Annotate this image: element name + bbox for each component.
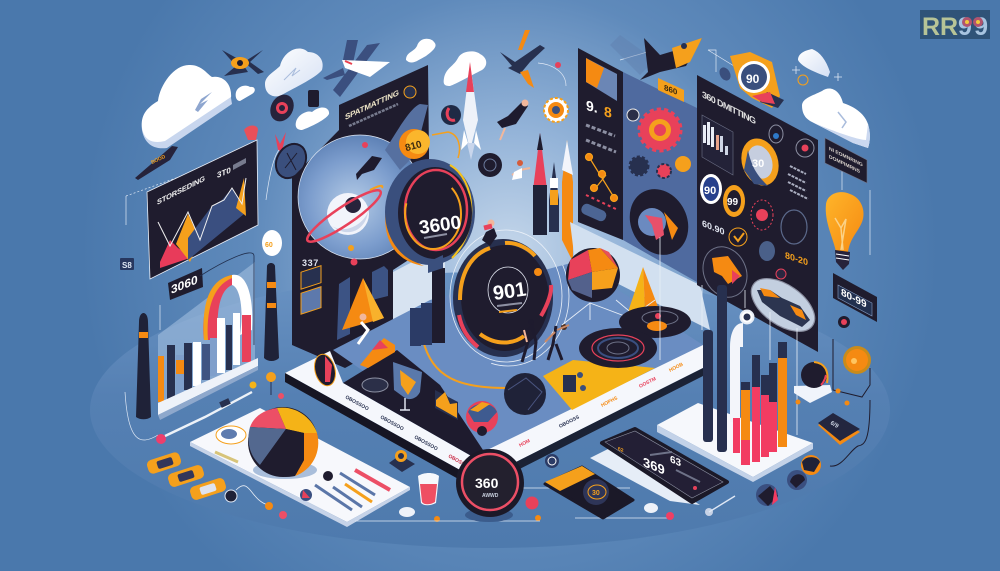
- node: red on left: [156, 382, 256, 444]
- icon: wine glass shield: [393, 362, 422, 410]
- rocket: white: [461, 62, 481, 160]
- icon: settings cog: [544, 98, 568, 122]
- yellow pin: [266, 372, 284, 399]
- donut: 30: [735, 134, 785, 190]
- platform labels: OBOSSOO: [447, 454, 473, 471]
- watermark: RR: [922, 13, 958, 41]
- main gear: [640, 110, 680, 150]
- card: yellow chip: 6/9: [829, 421, 840, 430]
- chart backing panel: [158, 262, 255, 408]
- white rounded stem: [730, 323, 743, 347]
- badge: 810: [399, 129, 430, 159]
- node network: [586, 154, 618, 202]
- figure: skydiver: [356, 156, 382, 180]
- phone: small: [545, 466, 633, 518]
- sweeping yellow arc: [423, 340, 506, 388]
- platform labels: HOM: [518, 438, 531, 449]
- cloud: large left: [142, 65, 232, 148]
- small pill: [644, 503, 658, 513]
- pencil rockets: [533, 133, 573, 262]
- callout: label panel: DOMPIMRNS: [829, 154, 860, 175]
- ring: dark: [545, 454, 559, 468]
- heading: spatmatting: SPATMATTING: [345, 87, 399, 122]
- icon: pie node: [300, 471, 333, 501]
- phone: large: 369: [643, 454, 665, 478]
- panel: left dark: [578, 48, 623, 240]
- figure: jumper: [497, 100, 528, 140]
- badge: 90: 90: [704, 185, 716, 197]
- rocket jet: [610, 35, 702, 80]
- dial on plinth: [794, 362, 832, 403]
- gauge: 360 bottom: [456, 449, 524, 522]
- white strip: right: [481, 345, 703, 475]
- platform labels: [344, 361, 685, 471]
- phone: small: 30: [592, 490, 600, 497]
- yellow wedge: [543, 360, 655, 410]
- badge: 860: [658, 78, 684, 102]
- ring handle: [740, 310, 754, 324]
- small eye icons: [769, 125, 814, 157]
- gauge: 360 bottom: AWWD: [482, 493, 499, 499]
- icon: red pin: [244, 126, 258, 140]
- pillar: far left: [136, 313, 151, 419]
- value box: 3060: [168, 268, 203, 300]
- watermark: 99: [958, 13, 988, 41]
- planet and ring: [302, 184, 386, 248]
- callout: label panel: NI EOMNRING: [829, 146, 863, 168]
- pie chart: [248, 407, 318, 479]
- value box: 3060: 3060: [171, 273, 198, 297]
- light band behind left panel: [393, 245, 445, 350]
- airplane icon: [323, 40, 390, 97]
- gauge: 360 bottom: 360: [475, 475, 499, 491]
- cloud: small left: [236, 86, 255, 101]
- mini donut: [216, 426, 246, 444]
- phone: large: 63: [670, 454, 681, 469]
- strip side: right: [490, 368, 703, 484]
- stage platform: [285, 262, 703, 490]
- icon: sparkle and dial: [792, 66, 842, 85]
- small target on dark floor: [362, 378, 388, 392]
- cloud: top centre: [406, 39, 436, 63]
- gauge: 3600: 3600: [418, 212, 463, 239]
- flying badge: 90: [717, 52, 784, 108]
- panel: left dark: 8: [604, 104, 612, 122]
- text: 80-20: 80-20: [785, 250, 808, 267]
- pillar: middle: [264, 263, 279, 361]
- cloud: right large: [802, 88, 870, 148]
- ball: dark: [504, 373, 546, 415]
- figure: runner with flame: [358, 314, 395, 368]
- mini chart on dark floor: [435, 390, 458, 420]
- drone icon: [222, 50, 264, 76]
- panel: left dark: 9.: [586, 98, 598, 117]
- panel: line chart: [147, 140, 258, 279]
- globe: [466, 401, 498, 436]
- platform labels: OBOSSOO: [413, 435, 439, 452]
- landscape capsule: [742, 268, 824, 342]
- small label tag: BOOD: [150, 154, 167, 166]
- icon: arrow chevron: [275, 132, 286, 152]
- dark button: [838, 316, 850, 328]
- floor: [333, 262, 703, 453]
- wired sensor: [225, 486, 287, 519]
- cloud: small centre: [296, 108, 329, 130]
- bar chart: right: [657, 285, 813, 482]
- platform labels: OBOOSS: [558, 414, 581, 430]
- small label tag: [135, 146, 178, 180]
- panel: spatmatting: [292, 65, 430, 368]
- cloud: top right small: [798, 49, 830, 77]
- icon: dark dial: [478, 153, 502, 177]
- platform labels: OBOSSOO: [344, 395, 370, 412]
- badge: 860: 860: [664, 83, 678, 97]
- bar mini chart: [702, 115, 733, 175]
- panel: middle blue: [619, 72, 699, 282]
- platform labels: HOPHS: [600, 395, 619, 409]
- card: yellow chip: [818, 413, 860, 445]
- mini cards: [301, 266, 321, 314]
- badge: white round tag: 60: [265, 242, 273, 249]
- small gears: [630, 156, 691, 178]
- white connector arcs: [562, 300, 655, 325]
- white strip: left: [285, 351, 492, 480]
- heading: 360 drafting: 360 DMITTING: [702, 89, 756, 127]
- value box: 80-99: [833, 273, 877, 322]
- badge: 99: [723, 185, 745, 217]
- map roundel: [695, 240, 755, 304]
- pill small: [399, 507, 415, 517]
- dark floor: [343, 350, 483, 457]
- ground ellipse: [90, 272, 890, 548]
- mini ui bars: [315, 470, 390, 510]
- icon: small spiral target: [266, 90, 298, 126]
- panel: right dark: [695, 75, 824, 352]
- dial: red gear: [751, 200, 773, 230]
- chart donut: [203, 275, 252, 340]
- strip side: left: [285, 373, 490, 490]
- text: 60.90: 60.90: [702, 218, 725, 237]
- cloud: top middle left: [265, 48, 323, 96]
- light band under right panels: [570, 222, 710, 330]
- cup: [418, 473, 439, 505]
- panel: line chart: 3T0: [217, 165, 231, 180]
- panel: line chart: STORSEDING: [157, 174, 205, 207]
- city and peak: [337, 266, 388, 340]
- disc: back: [619, 306, 691, 338]
- figure: small athlete: [512, 160, 530, 180]
- text lines: [788, 166, 808, 199]
- icon: satchel: [308, 90, 319, 107]
- small tag: s8: S8: [122, 261, 132, 270]
- aircraft: dark flyer: [500, 30, 566, 88]
- icon: light bulb: [826, 192, 864, 270]
- badge: 90: [700, 174, 722, 204]
- callout: label panel: [825, 138, 867, 183]
- gear stand: [389, 450, 415, 472]
- check badge: [729, 228, 747, 246]
- badge: white round tag: [262, 230, 282, 256]
- left bar chart: [158, 253, 258, 420]
- orange node: [535, 515, 541, 521]
- gauge: 3600: [385, 132, 475, 266]
- disc: front: [579, 328, 657, 368]
- flying badge: 90: 90: [746, 72, 760, 86]
- gauge: 901: 901: [492, 279, 528, 305]
- figure: runners: [522, 319, 569, 362]
- pills: yellow: [146, 451, 227, 501]
- small balls: orbit: [666, 388, 850, 520]
- watermark: [920, 10, 990, 41]
- wire loop: [830, 339, 870, 466]
- badge: 99: 99: [727, 197, 739, 208]
- phone: large: 62: [618, 446, 624, 454]
- chart base: [657, 403, 813, 477]
- platform labels: OBOSSOO: [379, 415, 405, 432]
- red ball: [526, 496, 538, 510]
- cone: [628, 267, 658, 312]
- thin connector posts: [660, 237, 797, 435]
- icon: dial blue: [759, 241, 775, 261]
- gauge: 901: [447, 226, 569, 366]
- pie sheet: [190, 407, 410, 527]
- number: 337: 337: [302, 258, 319, 268]
- centre tower: [428, 255, 445, 343]
- icon: compass gauge: [270, 138, 312, 184]
- icon: round badge on strip: [311, 352, 339, 388]
- badge: 810: 810: [404, 139, 423, 154]
- round earth portal: [619, 179, 699, 265]
- dial: outline: [781, 210, 807, 244]
- icon: panel badge: [404, 86, 416, 98]
- icon: red dial: [441, 105, 461, 125]
- platform labels: HOOB: [668, 361, 685, 374]
- figure: climber: [482, 220, 497, 246]
- porthole: [298, 135, 422, 259]
- mini board on wedge: [563, 372, 586, 392]
- coin: [843, 346, 871, 374]
- phone: large: [590, 429, 727, 505]
- donut: 30: 30: [752, 158, 764, 170]
- city skyline: [410, 303, 432, 346]
- small tag: s8: [120, 258, 134, 270]
- connector lines: [125, 50, 870, 518]
- value box: 80-99: 80-99: [841, 287, 867, 311]
- platform labels: OOSTM: [638, 376, 657, 390]
- ball: segmented: [566, 248, 620, 302]
- cloud: near rocket: [444, 51, 486, 86]
